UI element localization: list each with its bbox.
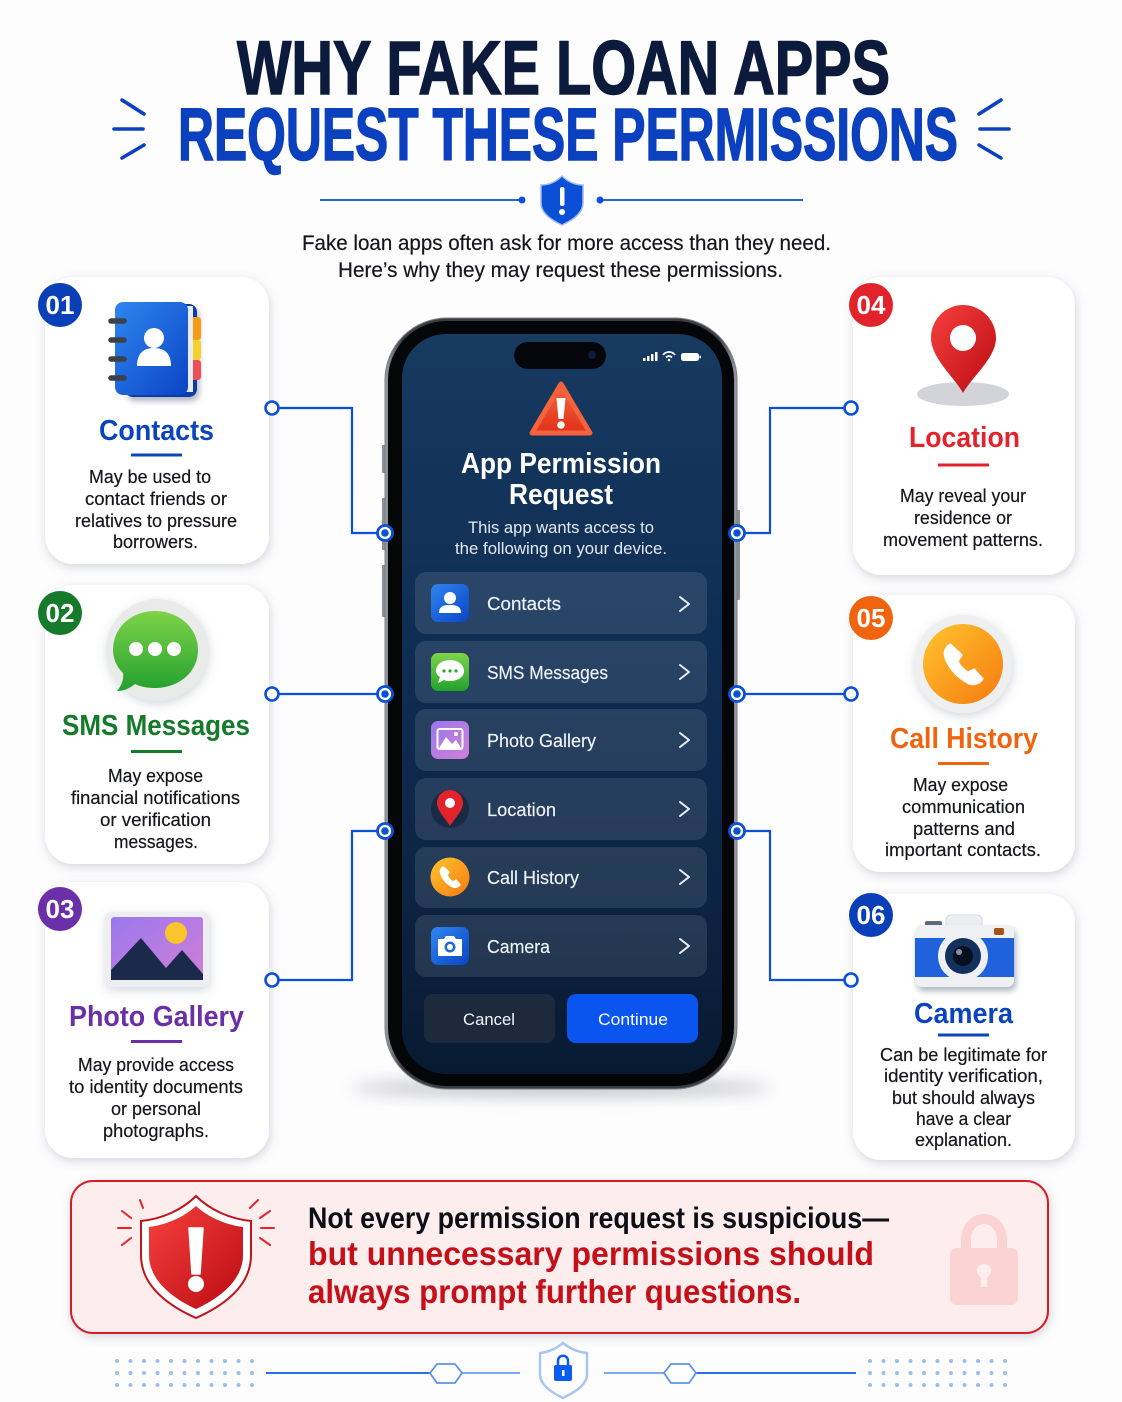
icon: faint lock: [950, 1214, 1018, 1305]
card text: relatives to pressure: [75, 511, 237, 531]
card text: May reveal your: [900, 486, 1026, 506]
banner message: always prompt further questions.: [308, 1273, 801, 1310]
card text: [71, 766, 240, 852]
card text: residence or: [914, 508, 1012, 528]
title: WHY FAKE LOAN APPS: [237, 26, 890, 111]
footer decoration: left dots: [115, 1359, 254, 1387]
panel: 01 contacts: [45, 277, 269, 564]
icon: picture: [105, 912, 209, 987]
panel: 02 sms messages: [45, 585, 269, 864]
card text: communication: [902, 797, 1025, 817]
footer lines with hexagons: [266, 1364, 856, 1383]
icon: red shield: [118, 1196, 274, 1318]
row: location: Location: [487, 800, 556, 820]
title divider with shield: [320, 176, 803, 225]
row: contacts: Contacts: [487, 594, 561, 614]
card text: movement patterns.: [883, 530, 1043, 550]
card text: financial notifications: [71, 788, 240, 808]
cancel button: Cancel: [463, 1010, 515, 1029]
panel: 06 camera: [853, 894, 1075, 1160]
row: sms messages: [415, 641, 707, 703]
card text: identity verification,: [884, 1066, 1043, 1086]
row: photo gallery: Photo Gallery: [487, 731, 596, 751]
icon: contact book: [111, 302, 201, 397]
row: sms messages: SMS Messages: [487, 663, 608, 683]
row: call history: [415, 847, 707, 908]
panel: 05 call history: [853, 595, 1075, 872]
number badges: 01: [46, 290, 74, 320]
phone: [351, 318, 771, 1096]
card text: Can be legitimate for: [880, 1045, 1047, 1065]
icon: map pin: [917, 305, 1009, 406]
row: contacts: [415, 572, 707, 634]
card text: patterns and: [913, 819, 1015, 839]
card text: or verification: [100, 810, 211, 830]
dialog heading: [461, 448, 661, 511]
panel: 06 camera: Camera: [914, 998, 1014, 1030]
connectors: phone to cards: [279, 408, 844, 980]
card text: [885, 775, 1041, 860]
panel: 04 location: [853, 277, 1075, 575]
card text: have a clear: [916, 1109, 1011, 1129]
panel: 02 sms messages: SMS Messages: [62, 710, 250, 742]
intro text: Fake loan apps often ask for more access than they need.: [302, 231, 831, 255]
card text: May expose: [913, 775, 1008, 795]
row: location: [415, 778, 707, 840]
number badges: 04: [857, 290, 886, 320]
card text: May expose: [108, 766, 203, 786]
row: photo gallery: [415, 709, 707, 771]
card text: [880, 1045, 1047, 1150]
banner message: [308, 1202, 889, 1310]
dialog heading: App Permission: [461, 448, 661, 480]
footer decoration: right dots: [868, 1359, 1007, 1387]
card text: [69, 1055, 243, 1141]
status icons: [643, 352, 701, 361]
card text: [75, 467, 237, 552]
row: camera: Camera: [487, 937, 551, 957]
title: [178, 26, 958, 176]
panel: 03 photo gallery: [45, 882, 269, 1158]
icon: warning triangle: [532, 384, 590, 433]
connector nodes: [266, 402, 858, 986]
banner message: Not every permission request is suspicious—: [308, 1202, 889, 1235]
card text: [883, 486, 1043, 550]
dialog heading: Request: [509, 479, 613, 511]
card text: contact friends or: [85, 489, 227, 509]
card text: explanation.: [915, 1130, 1012, 1150]
panel: 03 photo gallery: Photo Gallery: [69, 1001, 244, 1033]
banner message: but unnecessary permissions should: [308, 1235, 874, 1272]
card text: to identity documents: [69, 1077, 243, 1097]
number badges: [38, 283, 893, 937]
icon: phone handset: [914, 615, 1012, 713]
continue button: [567, 994, 698, 1043]
number badges: 02: [46, 598, 74, 628]
dialog description: This app wants access to: [468, 518, 654, 537]
card text: May be used to: [89, 467, 211, 487]
card text: photographs.: [103, 1121, 209, 1141]
card text: important contacts.: [885, 840, 1041, 860]
row: camera: [415, 915, 707, 977]
panel: 04 location: Location: [909, 422, 1020, 454]
number badges: 05: [857, 603, 885, 633]
dialog description: the following on your device.: [455, 539, 667, 558]
card text: May provide access: [78, 1055, 234, 1075]
row: call history: Call History: [487, 868, 579, 888]
intro text: [302, 231, 831, 282]
panel: 05 call history: Call History: [890, 723, 1038, 755]
intro text: Here’s why they may request these permissions.: [338, 258, 783, 282]
icon: footer lock shield: [540, 1343, 587, 1398]
card text: messages.: [114, 832, 198, 852]
number badges: 06: [857, 900, 885, 930]
dialog description: [455, 518, 667, 558]
warning banner: [71, 1181, 1048, 1333]
card text: or personal: [111, 1099, 201, 1119]
icon: chat bubble: [106, 599, 208, 701]
dynamic island: [514, 342, 606, 369]
number badges: 03: [46, 894, 74, 924]
panel: 01 contacts: Contacts: [99, 415, 214, 447]
cancel button: [424, 994, 555, 1043]
card text: but should always: [892, 1088, 1035, 1108]
card text: borrowers.: [113, 532, 198, 552]
icon: left burst lines: [114, 100, 144, 158]
icon: camera: [915, 915, 1014, 987]
continue button: Continue: [598, 1010, 668, 1029]
icon: right burst lines: [979, 100, 1009, 158]
